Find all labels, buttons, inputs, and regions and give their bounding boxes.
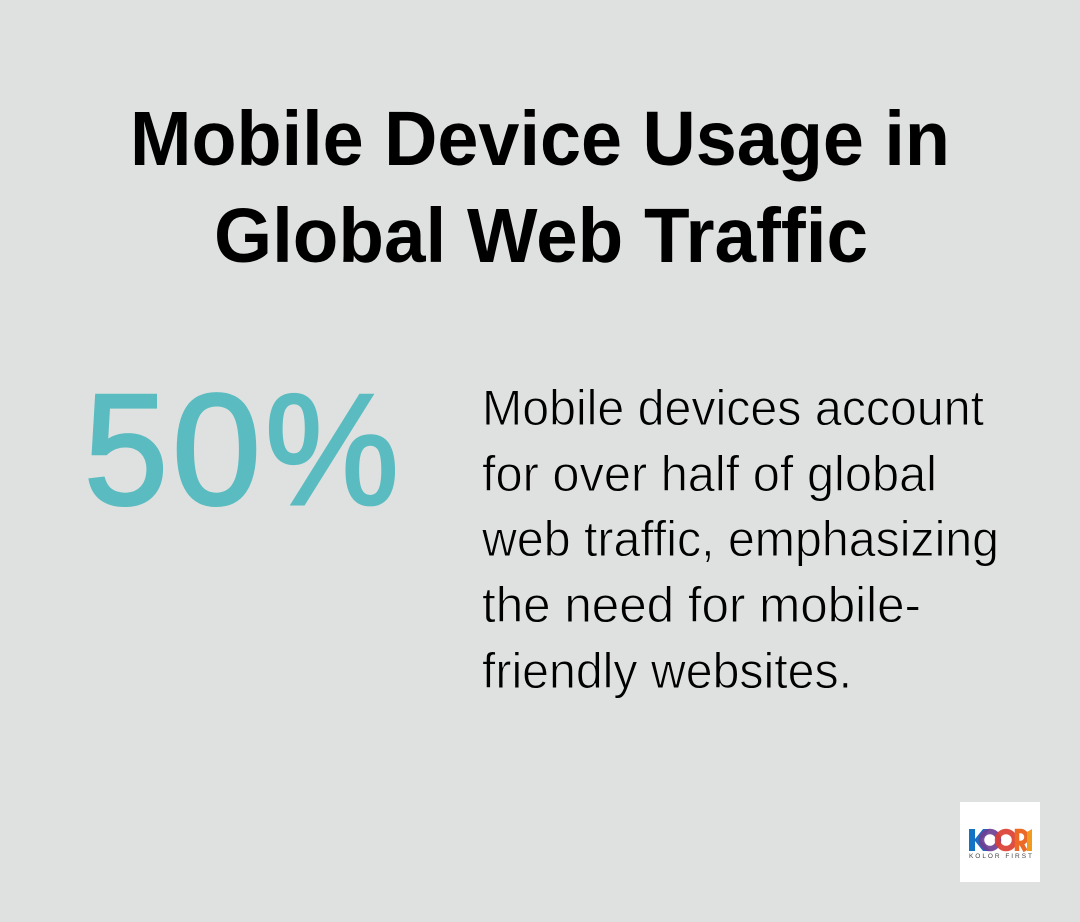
- logo: Koor1 Kolor First: [960, 802, 1040, 882]
- big stat: 50%: 0: [172, 362, 261, 538]
- description text: Mobile devices account: [482, 380, 984, 436]
- title: Mobile Device Usage in: [130, 96, 950, 182]
- title: Global Web Traffic: [214, 193, 868, 279]
- description text: friendly websites.: [482, 643, 852, 699]
- description text: web traffic, emphasizing: [481, 511, 999, 567]
- description text: [481, 380, 999, 699]
- big stat: 50%: 5: [84, 362, 168, 538]
- title: [130, 96, 950, 279]
- description text: the need for mobile-: [482, 577, 921, 633]
- big stat: 50%: [84, 362, 399, 538]
- logo: Koor1 Kolor First: KOLOR FIRST: [969, 853, 1032, 860]
- description text: for over half of global: [482, 446, 937, 502]
- big stat: 50%: %: [265, 362, 399, 538]
